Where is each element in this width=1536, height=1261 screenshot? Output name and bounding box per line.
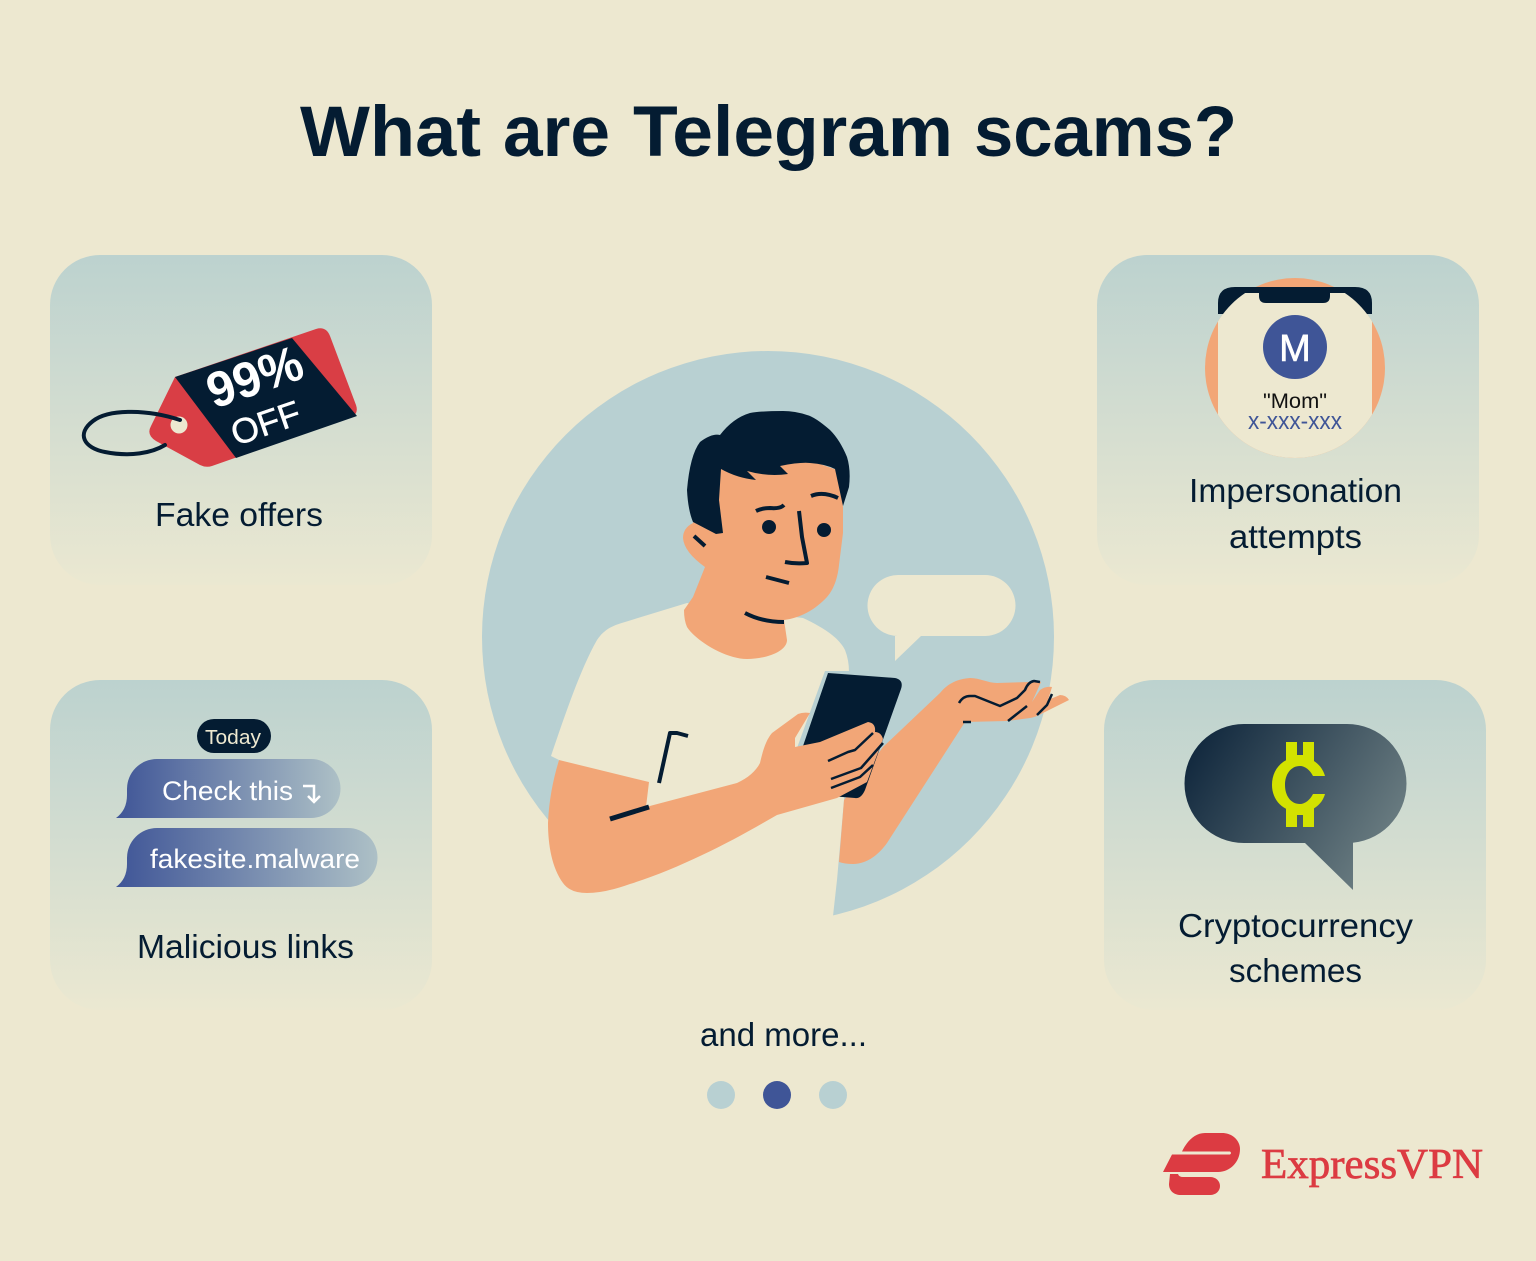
label: cryptocurrency schemes: schemes bbox=[1229, 952, 1362, 989]
hair bbox=[687, 411, 850, 534]
logo: ExpressVPN: ExpressVPN bbox=[1261, 1142, 1483, 1188]
icon: phone contact: x-xxx-xxx bbox=[1248, 408, 1342, 435]
label: cryptocurrency schemes bbox=[1178, 907, 1414, 989]
label: impersonation attempts bbox=[1189, 472, 1402, 555]
label: malicious links: Malicious links bbox=[137, 928, 354, 965]
icon: price tag: OFF bbox=[226, 394, 306, 454]
illustration: confused man with phone bbox=[482, 351, 1069, 930]
label: fake offers: Fake offers bbox=[155, 496, 323, 533]
phone bbox=[797, 671, 902, 798]
title bbox=[300, 93, 1237, 172]
shirt and body bbox=[500, 603, 849, 930]
badge: today: Today bbox=[205, 727, 261, 749]
panel: malicious links bbox=[50, 680, 432, 1010]
icon: phone contact: "Mom" bbox=[1263, 390, 1327, 413]
left arm and hand bbox=[548, 713, 883, 893]
chat bubble: fake link bbox=[116, 828, 378, 887]
face lines bbox=[694, 494, 838, 622]
panel: fake offers bbox=[50, 255, 432, 585]
icon: phone contact: M bbox=[1279, 328, 1311, 370]
title: scams? bbox=[974, 93, 1237, 172]
chat bubble: check this bbox=[116, 759, 340, 818]
background circle bbox=[482, 351, 1054, 923]
panel: impersonation attempts bbox=[1097, 255, 1479, 585]
icon: phone contact bbox=[1205, 278, 1385, 470]
finger and arm lines bbox=[610, 681, 1052, 819]
caption: and more: and more... bbox=[700, 1016, 867, 1053]
icon: price tag bbox=[84, 328, 357, 467]
chat bubble: check this: Check this bbox=[162, 776, 293, 806]
label: impersonation attempts: Impersonation bbox=[1189, 472, 1402, 509]
speech bubble bbox=[867, 575, 1015, 661]
title: Telegram bbox=[633, 93, 953, 172]
badge: today bbox=[197, 719, 271, 753]
title: What bbox=[300, 93, 481, 172]
icon: price tag: 99% bbox=[199, 335, 310, 419]
right arm and open hand bbox=[839, 678, 1069, 864]
head and neck bbox=[683, 450, 843, 659]
panel: cryptocurrency schemes bbox=[1104, 680, 1486, 1010]
logo: ExpressVPN bbox=[1163, 1133, 1483, 1195]
chat bubble: fake link: fakesite.malware bbox=[150, 844, 360, 874]
title: are bbox=[503, 93, 610, 172]
label: cryptocurrency schemes: Cryptocurrency bbox=[1178, 907, 1414, 944]
pagination dots bbox=[707, 1081, 847, 1109]
icon: crypto speech bubble bbox=[1185, 724, 1407, 890]
label: impersonation attempts: attempts bbox=[1229, 518, 1362, 555]
